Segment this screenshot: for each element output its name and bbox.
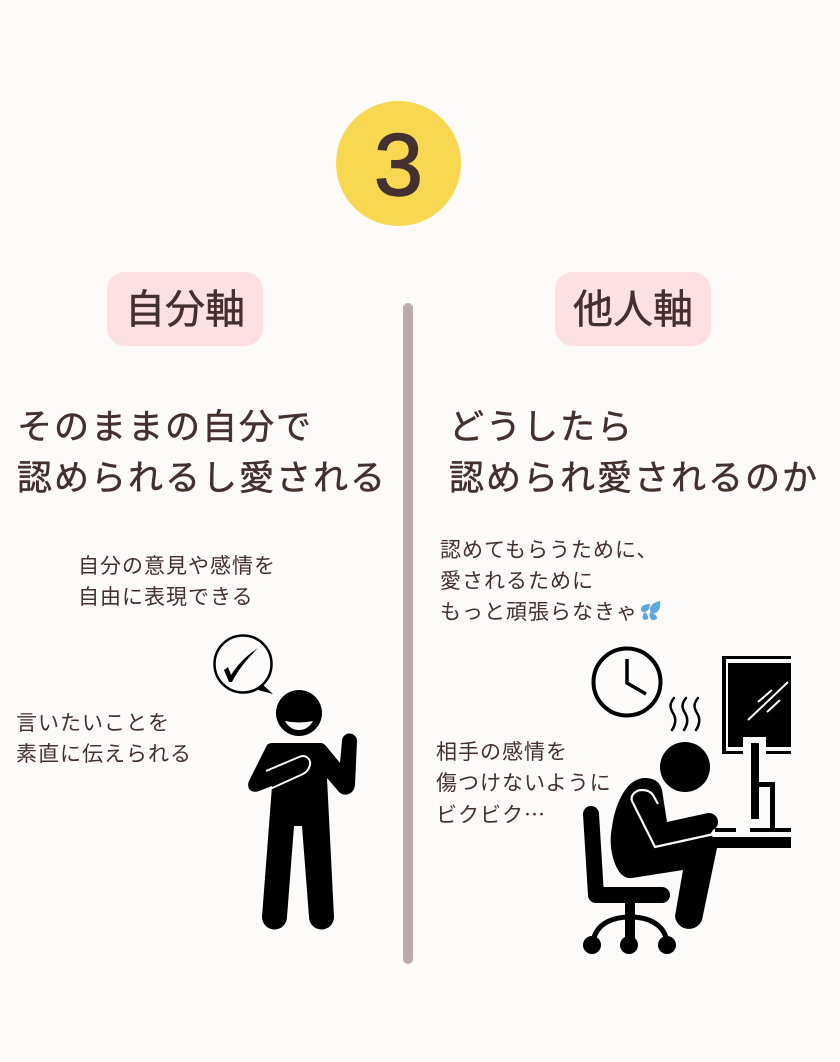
right headline — [449, 408, 819, 498]
icon: smiling person — [248, 690, 357, 930]
right text: must work harder: 認めてもらうために、 — [440, 539, 658, 562]
left text: being honest — [16, 712, 192, 766]
icon: steam — [670, 698, 699, 730]
icon: clock — [594, 648, 660, 716]
right text: must work harder: 愛されるために — [440, 570, 594, 593]
number badge: 3 — [374, 115, 423, 214]
left text: expressing opinions: 自分の意見や感情を — [78, 555, 276, 578]
icon: exhausted person at desk — [611, 742, 718, 929]
right text: walking on eggshells: ビクビク… — [436, 799, 546, 829]
center divider — [403, 303, 413, 964]
right text: walking on eggshells: 相手の感情を — [436, 741, 568, 764]
right headline: どうしたら — [449, 408, 634, 447]
left headline: そのままの自分で — [17, 408, 313, 447]
heading: 自分軸: 自分軸 — [125, 288, 245, 332]
right text: walking on eggshells: 傷つけないように — [436, 772, 612, 795]
right text: must work harder — [440, 539, 658, 624]
left text: being honest: 素直に伝えられる — [16, 743, 192, 766]
icon: sweat drops — [641, 601, 660, 620]
left headline: 認められるし愛される — [17, 459, 387, 498]
icon: speech bubble with check — [214, 636, 273, 694]
left text: expressing opinions: 自由に表現できる — [78, 586, 254, 609]
heading: 自分軸 — [107, 272, 263, 346]
heading: 他人軸: 他人軸 — [573, 288, 693, 332]
right text: must work harder: もっと頑張らなきゃ — [440, 601, 638, 624]
number badge — [336, 101, 461, 226]
heading: 他人軸 — [555, 272, 711, 346]
right text: walking on eggshells — [436, 741, 612, 829]
left text: being honest: 言いたいことを — [16, 712, 170, 735]
icon: office chair — [583, 814, 676, 954]
left headline — [17, 408, 387, 498]
left text: expressing opinions — [78, 555, 276, 609]
icon: monitor and stand — [687, 656, 791, 848]
right headline: 認められ愛されるのか — [449, 459, 819, 498]
